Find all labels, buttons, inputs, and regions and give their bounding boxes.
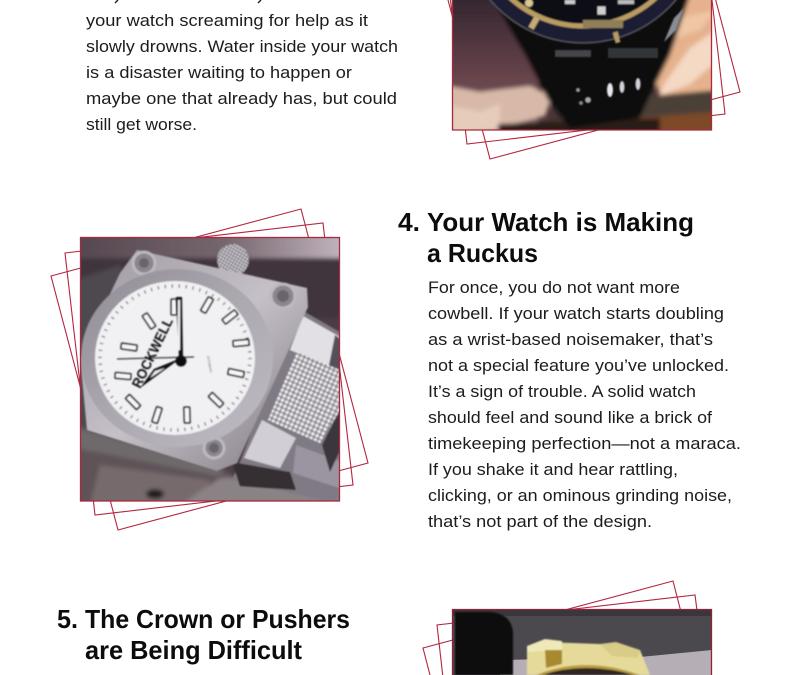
watch hands and logo: ROCKWELL — [128, 315, 176, 390]
panel: flooded watch photo with frames — [448, 0, 740, 159]
crown — [217, 244, 249, 276]
text block: section 4 body: clicking, or an ominous grinding noise, — [428, 487, 732, 505]
case — [80, 250, 308, 471]
watch face markers — [115, 297, 249, 424]
text block: section 4 body: that’s not part of the design. — [428, 513, 652, 531]
text block: section 4 body: cowbell. If your watch starts doubling — [428, 305, 724, 323]
text block: section 4 body: If you shake it and hear rattling, — [428, 461, 678, 479]
text block: section 4 body: not a special feature you’ve unlocked. — [428, 357, 729, 375]
text block: section 4 body: as a wrist-based noisemaker, that’s — [428, 331, 713, 349]
panel: gold watch photo with frames — [423, 581, 712, 675]
heading: section 5: The Crown or Pushers — [85, 604, 350, 634]
text block: section 3 body (continued): still get worse. — [86, 116, 197, 134]
heading: section 5 — [57, 604, 350, 665]
text block: section 4 body — [428, 279, 741, 531]
text block: section 3 body (continued): is a disaster waiting to happen or — [86, 64, 353, 82]
heading: section 5: are Being Difficult — [85, 635, 302, 665]
watch hands and logo — [117, 297, 213, 390]
heading: section 4: a Ruckus — [427, 238, 538, 268]
panel: silver Rockwell watch photo with frames — [51, 209, 368, 530]
text block: section 3 body (continued): slowly drowns. Water inside your watch — [86, 38, 398, 56]
heading: section 4: Your Watch is Making — [427, 207, 694, 237]
text block: section 4 body: It’s a sign of trouble. A solid watch — [428, 383, 696, 401]
text block: section 4 body: should feel and sound like a brick of — [428, 409, 712, 427]
heading: section 4 — [398, 207, 694, 268]
heading: section 5: 5. — [57, 604, 78, 634]
watch hands and logo: AUTOMATIC — [206, 355, 213, 374]
text block: section 4 body: timekeeping perfection—not a maraca. — [428, 435, 741, 453]
text block: section 4 body: For once, you do not want more — [428, 279, 680, 297]
text block: section 3 body (continued) — [86, 0, 398, 134]
bracelet — [233, 312, 339, 500]
text block: section 3 body (continued): your watch screaming for help as it — [86, 12, 368, 30]
text block: section 3 body (continued): maybe one that already has, but could — [86, 90, 397, 108]
heading: section 4: 4. — [398, 207, 420, 237]
